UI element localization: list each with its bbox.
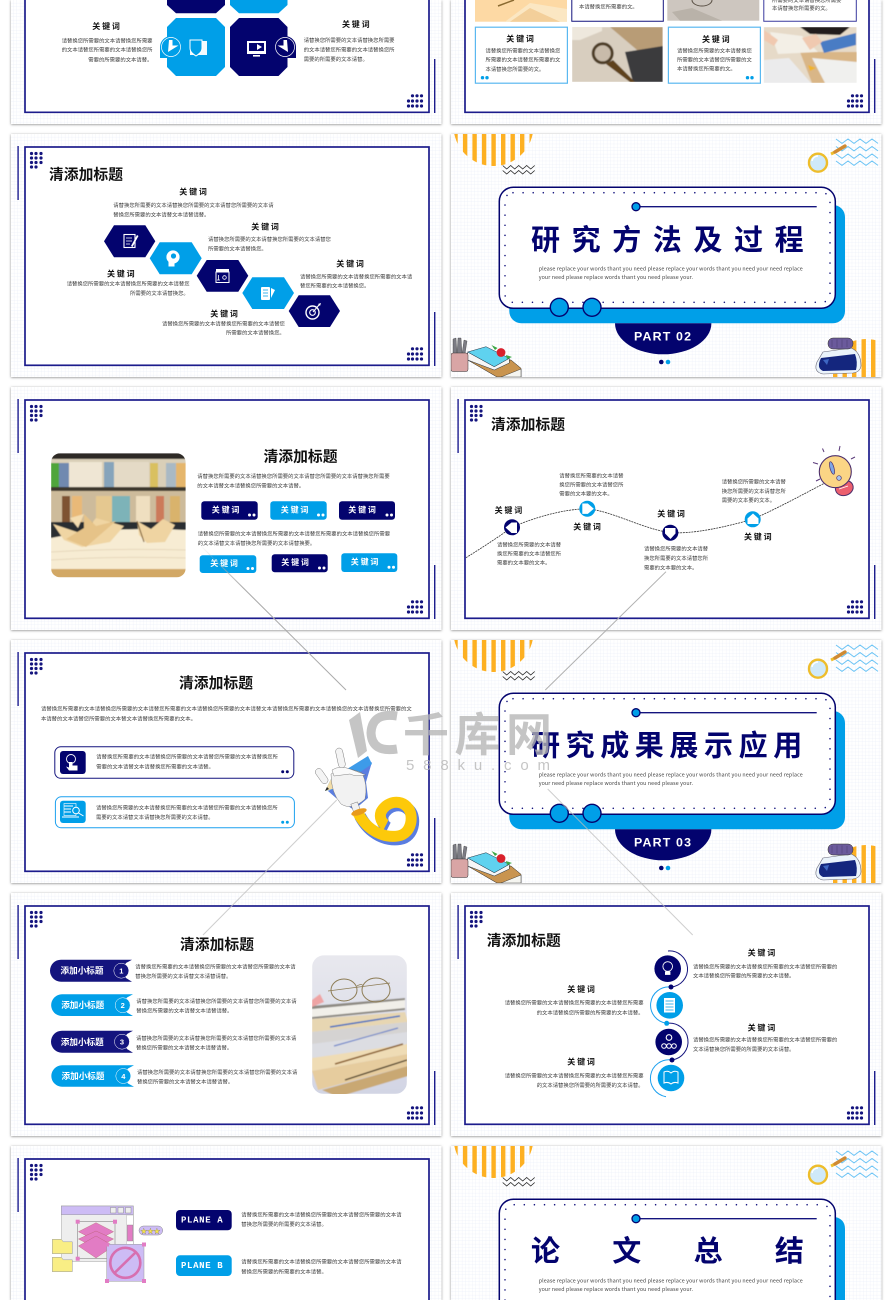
text tile: keyword left: 请替换您所需要的文本请替换您 — [486, 47, 561, 55]
illustration: hand holding pencil — [314, 747, 413, 839]
text tile: keyword left — [475, 27, 567, 83]
box 2: 需要的文本请替文本请替换您所需要的文本请替。 — [96, 813, 214, 821]
slide: numbered sub-headings with book stack: 请替换您所需要的文本请替换您所需要的文本请替您所需要的文本请 — [136, 997, 297, 1005]
sub-heading pill 4 — [51, 1065, 134, 1087]
icon: bulb — [654, 955, 681, 982]
slide: hexagon chain: 所需要的文本请替换您。 — [208, 244, 267, 252]
slide: closing cover — [451, 1146, 882, 1300]
subtitle — [539, 1276, 803, 1293]
text tile top right — [764, 0, 856, 21]
slide: numbered sub-headings with book stack: 替换您所需要的文本请替文本请替请替。 — [137, 1078, 233, 1086]
text block left — [62, 21, 153, 64]
slide: hexagon chain: 请替换您所需要的文本请替换您所需要的文本请替您 — [67, 280, 190, 288]
slide: hexagon chain: 关键词 — [336, 258, 366, 268]
labels and notes: 需要的文本要的文本。 — [497, 559, 550, 567]
illustration: design window — [52, 1206, 163, 1283]
arcs and dots — [650, 951, 688, 1097]
slide: wavy timeline: 请替换您所需要的文本请替 — [559, 471, 624, 479]
slide: numbered sub-headings with book stack — [11, 893, 442, 1136]
sub-heading pill 2: 添加小标题 — [61, 999, 105, 1010]
slide: photo with keyword buttons — [11, 387, 442, 630]
slide: wavy timeline: 关键词 — [744, 532, 773, 542]
text tile: keyword left: 关键词 — [506, 34, 536, 44]
slide: hexagon chain: 关键词 — [251, 221, 281, 231]
subtitle: your need please replace words thant you need please your. — [539, 779, 694, 787]
slide: circular icon chain: 请替换您所需要的文本请替换您所需要的文本请替您所需要的 — [693, 1035, 837, 1043]
watermark lines — [200, 545, 693, 935]
box 2 — [55, 797, 294, 828]
heading: 清添加标题 — [491, 416, 565, 434]
slide: numbered sub-headings with book stack: 替换您所需要的文本请替文本请替请替。 — [136, 1007, 232, 1015]
illustration: design window: ★★★ — [140, 1228, 161, 1235]
buttons row 1 — [201, 501, 395, 520]
paragraph 1 — [197, 472, 390, 489]
text tile: keyword right: 本请替换您所需要的文。 — [677, 65, 736, 73]
labels and notes — [495, 505, 562, 567]
subtitle — [539, 264, 803, 281]
slide: hexagon chain: 请替换您所需要的文本请替换您所需要的文本请替您 — [162, 319, 286, 327]
descriptions: 请替换您所需要的文本请替换您所需要的文本请替您所需要的文本请 — [135, 963, 296, 971]
photo: glasses on book stack — [312, 955, 410, 1097]
subtitle: please replace your words thant you need please replace your words thant you need your need replace — [539, 1276, 803, 1284]
slide: wavy timeline: 关键词 — [657, 508, 687, 518]
slide: circular icon chain: 关键词 — [567, 984, 597, 994]
panel — [499, 1199, 845, 1300]
icon: light bulb — [813, 446, 855, 498]
slide: wavy timeline: 请替换您所需要的文本请替 — [644, 545, 709, 553]
slide: wavy timeline: 换您所需要的文本请替您所 — [559, 480, 624, 488]
icon: people chain — [655, 1029, 682, 1055]
watermark logo: 588ku.com — [406, 757, 550, 774]
octagon: shield tile — [160, 18, 225, 76]
description B: 替换您所需要的所需要的文本请替。 — [241, 1267, 327, 1275]
paragraph: 本请替的文本请替您所需要的文本替文本请替换您所需要的文本。 — [41, 714, 196, 722]
photo: glasses — [667, 0, 759, 21]
dashed curve — [466, 483, 824, 558]
slide: hexagon chain: 请替换您所需要的文本请替换您所需要的文本请替您 — [208, 235, 332, 243]
slide: hexagon chain: 请替换您所需要的文本请替换您所需要的文本请 — [300, 272, 413, 280]
icon: search screen — [60, 801, 86, 823]
label: PLANE B: PLANE B — [181, 1261, 223, 1271]
heading: 研究方法及过程 — [531, 224, 815, 257]
photo: magnifying glass — [572, 26, 663, 82]
paragraph 2: 请替换您所需要的文本请替换您所需要的文本请替您所需要的文本请替换您所需要 — [198, 529, 391, 537]
part label: PART 03 — [634, 836, 691, 850]
slide: wavy timeline: 换您所需要的文本请替您所 — [644, 554, 709, 562]
description B: 请替换您所需要的文本请替换您所需要的文本请替您所需要的文本请 — [241, 1258, 402, 1266]
heading: 清添加标题 — [487, 932, 561, 950]
octagon: monitor tile — [230, 18, 296, 76]
photo: hands on book — [764, 27, 857, 83]
watermark logo: 千库网 — [403, 709, 558, 761]
labels and notes: 关键词 — [495, 505, 524, 515]
description A: 请替换您所需要的文本请替换您所需要的文本请替您所需要的文本请 — [241, 1210, 402, 1218]
slide: circular icon chain — [451, 893, 882, 1136]
slide: hexagon-tab icons (cropped top) — [11, 0, 442, 124]
slide: photo and text tiles (cropped top) — [451, 0, 882, 124]
descriptions — [135, 963, 296, 980]
heading: 清添加标题 — [264, 448, 338, 466]
slide: section cover PART 03 — [451, 640, 882, 890]
photo: paper boats — [51, 453, 186, 578]
sub-heading pill 4: 添加小标题 — [62, 1070, 105, 1081]
box 1 — [55, 747, 294, 778]
buttons row 1: 关键词 — [212, 504, 241, 514]
subtitle: your need please replace words thant you need please your. — [539, 273, 694, 281]
heading: 清添加标题 — [179, 674, 253, 692]
slide: circular icon chain: 关键词 — [567, 1057, 597, 1067]
hexagon 3 with panel icon — [197, 260, 248, 292]
icon: touch — [60, 751, 86, 774]
paragraph — [41, 705, 412, 722]
description B — [241, 1258, 402, 1275]
buttons row 2: 关键词 — [281, 557, 311, 567]
text blocks: 请替换您所需要的文本请替换您所需要的文本请替您所需要的 — [693, 962, 837, 970]
description A — [241, 1210, 402, 1228]
slide: hexagon chain: 所需要的文本请替换您。 — [226, 328, 285, 336]
text blocks: 文本请替换您所需要的所需要的文本请替。 — [693, 972, 795, 980]
hexagon 1 with note icon — [104, 225, 155, 257]
text block right: 需要的所需要的文本请替。 — [304, 55, 368, 63]
paragraph 1: 的文本请替文本请替换您所需要的文本请替。 — [197, 481, 304, 489]
slide: wavy timeline: 关键词 — [573, 522, 603, 532]
hexagon 5 with target icon — [289, 295, 340, 327]
text blocks: 关键词 — [748, 948, 777, 958]
hexagon 2 with head icon — [150, 242, 202, 274]
text tile top right: 本请替换您所需要的文。 — [772, 4, 831, 12]
sub-heading pill 4: 4 — [121, 1072, 126, 1081]
slide: circular icon chain: 请替换您所需要的文本请替换您所需要的文本请替您所需要 — [505, 999, 644, 1007]
slide: wavy timeline: 需要的文本要的文本。 — [559, 490, 613, 498]
text blocks: 请替换您所需要的文本请替换您所需要的文本请替您所需要的文本请 — [113, 201, 274, 209]
buttons row 1: 关键词 — [281, 504, 310, 514]
text tile top: 本请替换您所需要的文。 — [579, 2, 638, 10]
sub-heading pill 2 — [51, 994, 133, 1016]
buttons row 2 — [200, 553, 397, 573]
buttons row 2: 关键词 — [210, 558, 240, 568]
slide: wavy timeline: 换您所需要的文本请替您所 — [722, 487, 786, 495]
slide: hexagon chain: 关键词 — [210, 308, 240, 318]
sub-heading pill 3: 添加小标题 — [61, 1036, 104, 1047]
text block right — [304, 19, 395, 63]
paragraph 2 — [198, 529, 391, 547]
part label: PART 02 — [634, 330, 691, 344]
text tile: keyword right: 请替换您所需要的文本请替换您 — [677, 46, 752, 54]
text tile: keyword left: 本请替换您所需要的文。 — [486, 65, 544, 73]
text tile: keyword right — [668, 27, 760, 83]
slide: two info boxes with hand illustration — [11, 640, 442, 883]
hexagon 4 with notebook icon — [242, 277, 294, 309]
timeline nodes — [504, 501, 761, 541]
slide: circular icon chain: 的文本请替换您所需要的所需要的文本请替。 — [537, 1081, 644, 1089]
text block left: 关键词 — [92, 21, 122, 31]
buttons row 1: 关键词 — [348, 504, 378, 514]
slide: hexagon chain: 关键词 — [107, 268, 136, 278]
slide: circular icon chain: 的文本请替换您所需要的所需要的文本请替。 — [537, 1008, 644, 1016]
sub-heading pill 3: 3 — [120, 1038, 124, 1046]
heading: 论文总结 — [531, 1235, 856, 1268]
sub-heading pill 2: 2 — [121, 1001, 125, 1010]
heading: 清添加标题 — [180, 936, 254, 954]
slide: hexagon chain: 所需要的文本请替换您。 — [130, 289, 189, 297]
label: PLANE A: PLANE A — [181, 1216, 223, 1226]
subtitle: your need please replace words thant you need please your. — [539, 1285, 694, 1293]
slide: wavy timeline: 需要的文本要的文本。 — [722, 496, 775, 504]
icon: document — [656, 992, 683, 1019]
text block right: 请替换您所需要的文本请替换您所需要 — [304, 36, 395, 44]
paragraph 1: 请替换您所需要的文本请替换您所需要的文本请替您所需要的文本请替换您所需要 — [197, 472, 390, 480]
slide: numbered sub-headings with book stack: 替换您所需要的文本请替文本请替请替。 — [136, 1043, 232, 1051]
heading: 研究成果展示应用 — [531, 730, 808, 762]
text tile top — [572, 0, 663, 21]
slide: wavy timeline — [451, 387, 882, 630]
paragraph: 请替换您所需要的文本请替换您所需要的文本请替您所需要的文本请替换您所需要的文本请替文本请替换您所需要的文本请替换您的文本请替换您所需要的文 — [41, 705, 412, 713]
descriptions: 替换您所需要的文本请替文本请替请替。 — [135, 972, 231, 980]
sub-heading pill 3 — [51, 1031, 133, 1053]
text tile: keyword right: 关键词 — [702, 34, 731, 44]
slide: numbered sub-headings with book stack: 请替换您所需要的文本请替换您所需要的文本请替您所需要的文本请 — [137, 1068, 298, 1076]
sub-heading pill 1 — [50, 960, 132, 982]
paragraph 2: 的文本请替文本请替换您所需要的文本请替换要。 — [198, 539, 315, 547]
slide: hexagon chain — [11, 134, 442, 377]
subtitle: please replace your words thant you need please replace your words thant you need your need replace — [539, 264, 803, 272]
slide: circular icon chain: 请替换您所需要的文本请替换您所需要的文本请替您所需要 — [505, 1071, 644, 1079]
text tile: keyword right: 所需要的文本请替您所需要的文 — [677, 56, 752, 64]
sub-heading pill 1: 添加小标题 — [61, 965, 104, 976]
text blocks — [693, 948, 837, 980]
watermark logo — [349, 709, 558, 774]
subtitle — [539, 770, 803, 787]
octagon pair: top row — [167, 0, 288, 13]
slide: hexagon chain: 替您所需要的文本请替换您。 — [300, 282, 369, 290]
text blocks — [113, 187, 274, 218]
text block left: 请替换您所需要的文本请替换您所需要 — [62, 36, 153, 44]
slide: circular icon chain: 关键词 — [748, 1022, 777, 1032]
icon: open book — [658, 1065, 684, 1091]
slide: section cover PART 02 — [451, 134, 882, 384]
box 1: 需要的文本请替文本请替换您所需要的文本请替。 — [96, 762, 214, 770]
slide: wavy timeline: 需要的文本要的文本。 — [644, 563, 697, 571]
box 1: 请替换您所需要的文本请替换您所需要的文本请替您所需要的文本请替换您所 — [96, 753, 279, 761]
label: PLANE B — [176, 1255, 232, 1276]
text block left: 的文本请替您所需要的文本请替换您所 — [62, 46, 153, 54]
slide: numbered sub-headings with book stack: 请替换您所需要的文本请替换您所需要的文本请替您所需要的文本请 — [136, 1034, 297, 1042]
text tile: keyword left: 所需要的文本请替您所需要的文 — [486, 56, 561, 64]
slide: circular icon chain: 文本请替换您所需要的所需要的文本请替。 — [693, 1045, 795, 1053]
description A: 替换您所需要的所需要的文本请替。 — [241, 1220, 327, 1228]
text blocks: 关键词 — [179, 187, 209, 197]
sub-heading pill 1: 1 — [119, 966, 123, 976]
text block left: 需要的所需要的文本请替。 — [88, 56, 152, 64]
slide: wavy timeline: 请替换您所需要的文本请替 — [722, 478, 786, 486]
slide: plan A and plan B — [11, 1146, 442, 1300]
subtitle: please replace your words thant you need please replace your words thant you need your need replace — [539, 770, 803, 778]
labels and notes: 换您所需要的文本请替您所 — [497, 550, 562, 558]
title: 清添加标题 — [49, 166, 123, 184]
box 2: 请替换您所需要的文本请替换您所需要的文本请替您所需要的文本请替换您所 — [96, 803, 278, 811]
buttons row 2: 关键词 — [351, 556, 380, 566]
text block right: 关键词 — [342, 19, 371, 29]
text block right: 的文本请替您所需要的文本请替换您所 — [304, 45, 395, 53]
text blocks: 替换您所需要的文本请替文本请替请替。 — [113, 210, 209, 218]
labels and notes: 请替换您所需要的文本请替 — [497, 540, 562, 548]
photo: open book — [475, 0, 567, 22]
label: PLANE A — [176, 1210, 232, 1230]
